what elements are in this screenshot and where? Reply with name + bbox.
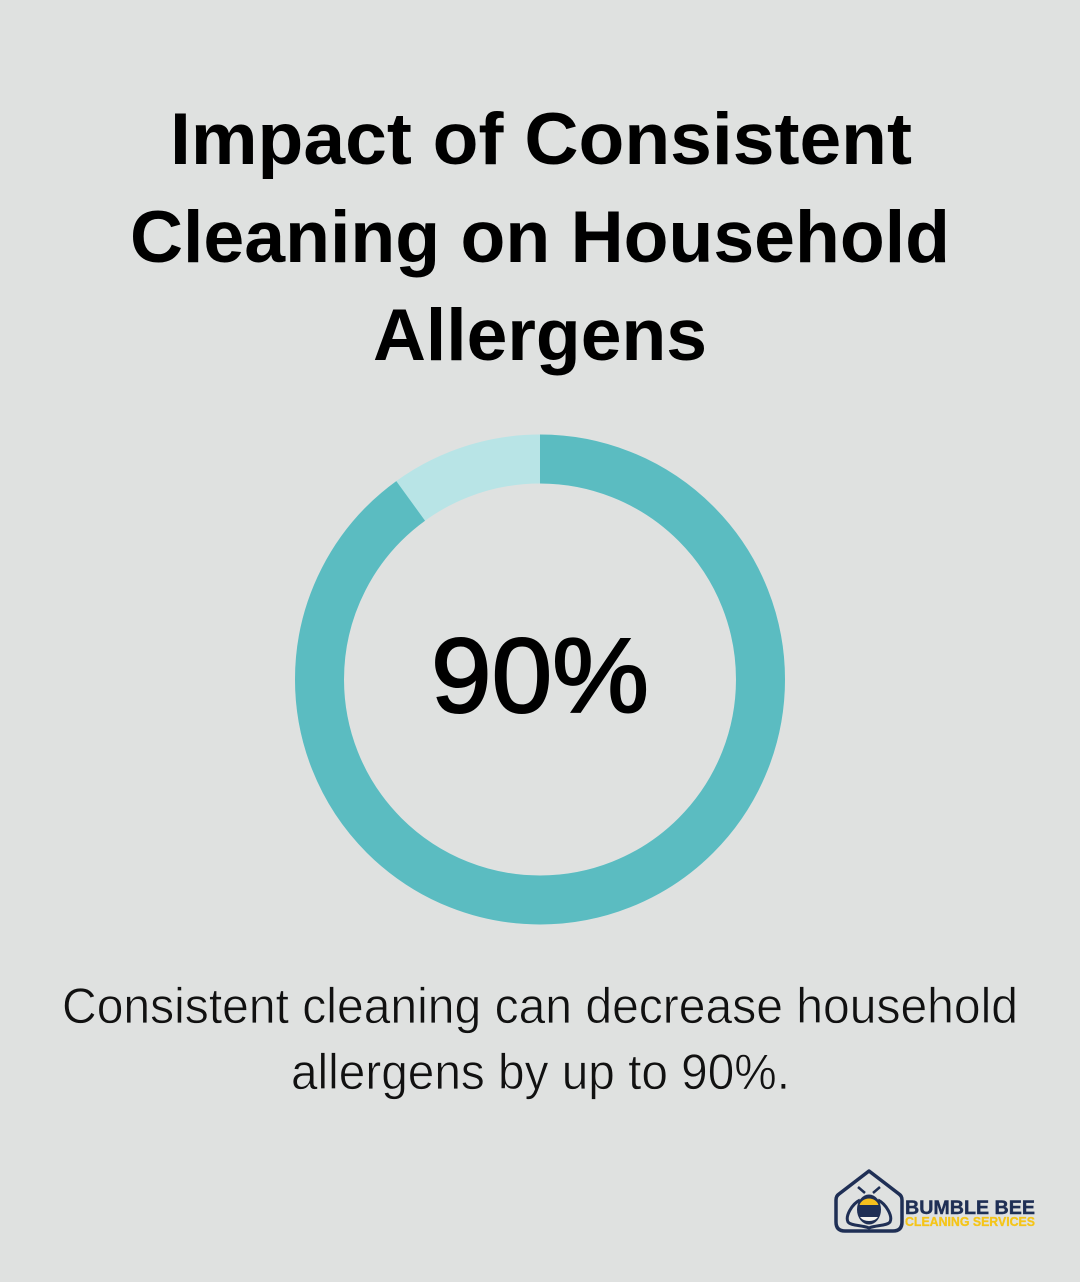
description xyxy=(62,978,1018,1100)
description: Consistent cleaning can decrease household xyxy=(62,978,1018,1034)
icon: house with bee xyxy=(836,1171,902,1231)
donut value: 90% xyxy=(431,617,649,735)
title: Allergens xyxy=(373,295,707,376)
title: Cleaning on Household xyxy=(130,197,950,278)
logo: Bumble Bee Cleaning Services xyxy=(836,1171,1035,1231)
donut chart: 90% xyxy=(320,459,760,900)
description: allergens by up to 90%. xyxy=(291,1044,790,1100)
title: Impact of Consistent xyxy=(170,99,912,180)
title xyxy=(130,99,950,376)
logo tagline: CLEANING SERVICES xyxy=(905,1215,1035,1229)
logo wordmark: BUMBLE BEE xyxy=(905,1198,1035,1219)
